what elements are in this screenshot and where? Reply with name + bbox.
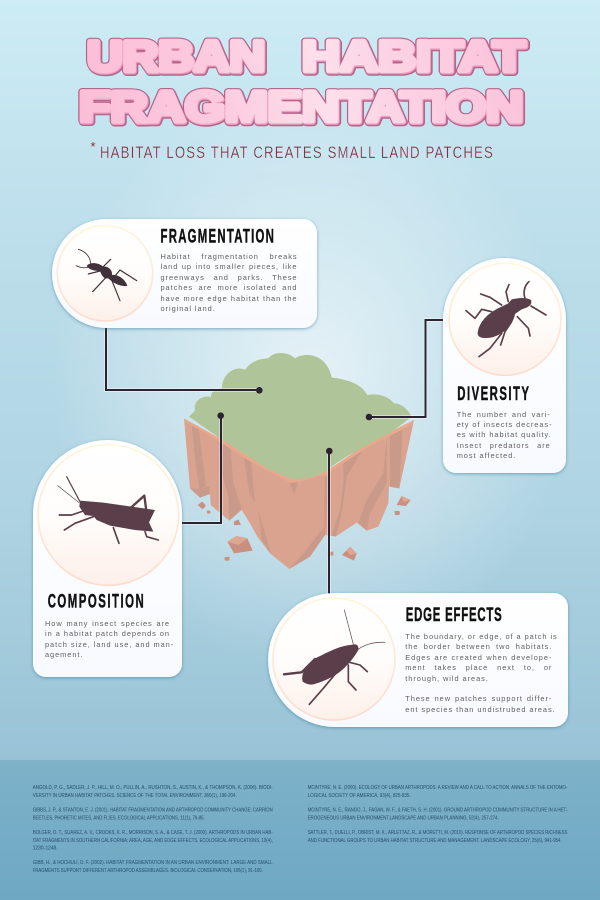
references: right column: LOGICAL SOCIETY OF AMERICA, 93(4), 825-835. xyxy=(308,793,411,799)
references: right column xyxy=(308,785,568,844)
title: HABITAT xyxy=(302,34,526,82)
title: URBAN xyxy=(87,32,265,80)
body text: greenways and parks. These xyxy=(160,273,298,282)
panel: fragmentation xyxy=(52,219,317,328)
body text xyxy=(160,252,298,313)
body text: These new patches support differ- xyxy=(405,694,552,703)
body text: original land. xyxy=(160,304,216,313)
heading: DIVERSITY xyxy=(457,384,529,405)
body text: in a habitat patch depends on xyxy=(45,629,170,638)
icon: cockroach xyxy=(272,597,396,721)
rock body xyxy=(184,418,414,569)
references: left column: VERSITY IN URBAN HABITAT PATCHES. SCIENCE OF THE TOTAL ENVIRONMENT, 360(1), 196-204. xyxy=(33,793,237,799)
body text: How many insect species are xyxy=(45,619,170,628)
green grass top xyxy=(189,353,412,479)
references: left column: ITAT FRAGMENTS IN SOUTHERN CALIFORNIA: AREA, AGE, AND EDGE EFFECTS. ECOLOGICAL APPLICATIONS, 10(4), xyxy=(33,838,273,844)
body text: The boundary, or edge, of a patch is xyxy=(405,632,558,641)
body text: agement. xyxy=(45,650,83,659)
icon: cricket xyxy=(37,444,180,586)
body text: ent species than undistrubed areas. xyxy=(405,705,556,714)
floating island illustration xyxy=(184,353,414,569)
body text: ment takes place next to, or xyxy=(405,663,552,672)
body text: through, wild areas. xyxy=(405,674,489,683)
references: left column: ANGOLD, P. G., SADLER, J. P., HILL, M. O., PULLIN, A., RUSHTON, S., AUSTIN, K., & THOMPSON, K. (2006). BIODI- xyxy=(33,785,273,791)
title: URBAN xyxy=(88,34,266,82)
body text: patches are more isolated and xyxy=(160,283,298,292)
heading: EDGE EFFECTS xyxy=(406,605,502,626)
body text: The number and vari- xyxy=(457,410,551,418)
body text: Edges are created when develope- xyxy=(405,653,552,662)
body text xyxy=(405,632,558,714)
icon: ant xyxy=(56,225,154,322)
body text xyxy=(456,410,552,460)
references: left column: GIBBS, J. P., & STANTON, E. J. (2001). HABITAT FRAGMENTATION AND ARTHROPOD COMMUNITY CHANGE: CARRION xyxy=(33,807,273,813)
body text: most affected. xyxy=(457,451,516,460)
fragment highlights xyxy=(227,496,411,555)
bottom references band background xyxy=(0,760,600,900)
title xyxy=(78,32,530,132)
body text: the border between two habitats. xyxy=(405,642,552,651)
body text: ety of insects decreas- xyxy=(457,420,552,429)
title: FRAGMENTATION xyxy=(80,84,524,132)
subtitle: * xyxy=(90,139,96,154)
panel: composition xyxy=(33,440,182,677)
title: HABITAT xyxy=(302,32,525,80)
body text: patch size, land use, and man- xyxy=(45,640,174,649)
references: right column: EROGENEOUS URBAN ENVIRONMENT.LANDSCAPE AND URBAN PLANNING, 52(4), 257-274. xyxy=(308,815,499,821)
body text: es with habitat quality. xyxy=(457,430,552,439)
references: left column: 1230-1248. xyxy=(33,845,58,851)
panel: edge effects xyxy=(268,593,568,727)
title: URBAN xyxy=(88,34,266,82)
body text: land up into smaller pieces, like xyxy=(160,262,298,271)
rock shadows xyxy=(190,425,403,569)
title: FRAGMENTATION xyxy=(79,83,523,131)
title: HABITAT xyxy=(303,34,526,82)
body text: Insect predators are xyxy=(457,441,551,450)
falling rock fragments xyxy=(198,496,411,561)
references: left column: BOLGER, D. T., SUAREZ, A. V., CROOKS, K. R., MORRISON, S. A., & CASE, T. J. (2000). ARTHROPODS IN URBAN HAB- xyxy=(33,830,273,836)
body text: have more edge habitat than the xyxy=(160,294,298,303)
references: left column: FRAGMENTS SUPPORT DIFFERENT ARTHROPOD ASSEMBLAGES. BIOLOGICAL CONSERVATION, 106(1), 91-100. xyxy=(33,868,263,874)
panel: diversity xyxy=(443,258,566,473)
title: URBAN xyxy=(87,32,265,80)
title: FRAGMENTATION xyxy=(79,83,523,131)
subtitle: HABITAT LOSS THAT CREATES SMALL LAND PATCHES xyxy=(100,144,493,162)
heading: FRAGMENTATION xyxy=(160,227,274,247)
references: left column xyxy=(32,785,273,874)
references: left column: GIBB, H., & HOCHULI, D. F. (2002). HABITAT FRAGMENTATION IN AN URBAN ENVIRONMENT: LARGE AND SMALL xyxy=(33,860,273,866)
references: left column: BEETLES, PHORETIC MITES, AND FLIES. ECOLOGICAL APPLICATIONS, 11(1), 79-85. xyxy=(33,815,205,821)
title: FRAGMENTATION xyxy=(80,84,524,132)
body text: Habitat fragmentation breaks xyxy=(160,252,298,261)
icon: beetle xyxy=(448,262,562,376)
heading: COMPOSITION xyxy=(48,592,144,612)
body text xyxy=(45,619,174,659)
title: HABITAT xyxy=(302,32,525,80)
grass top rim xyxy=(184,418,414,483)
